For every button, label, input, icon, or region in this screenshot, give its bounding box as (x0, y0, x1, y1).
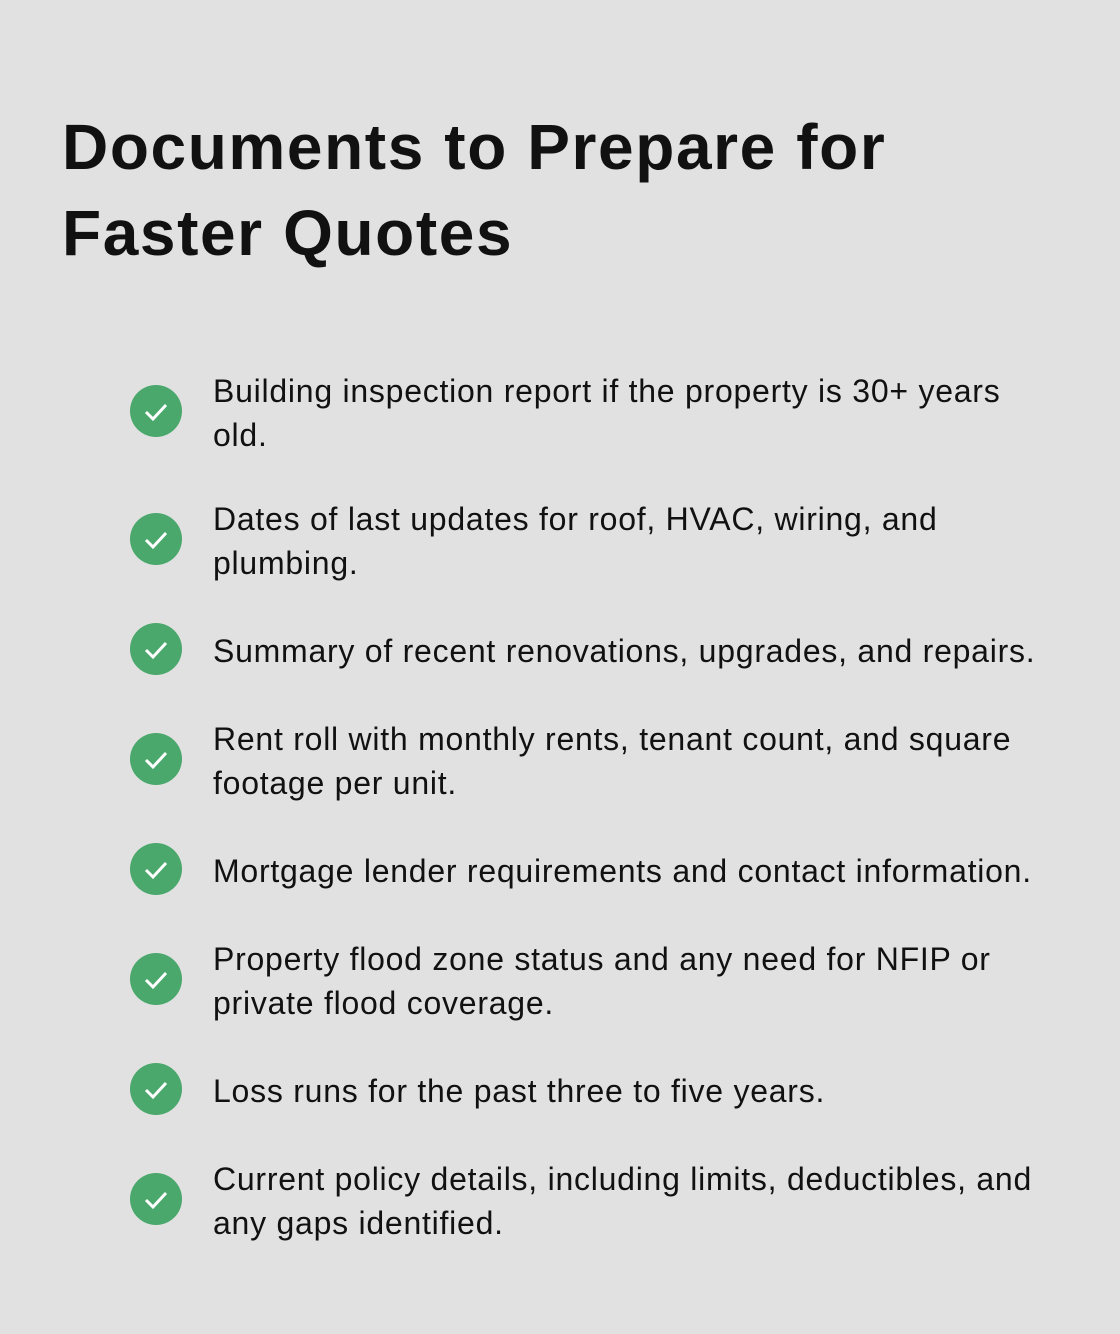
item 8: Current policy details, including limits, deductibles, and (213, 1161, 1032, 1197)
item 1: Building inspection report if the property is 30+ years (213, 373, 1000, 409)
title: Faster Quotes (62, 197, 513, 269)
checklist (130, 373, 1035, 1241)
icon: check (130, 843, 182, 895)
item 2: plumbing. (213, 545, 358, 581)
item 4 (130, 721, 1011, 801)
item 1 (130, 373, 1000, 453)
icon: check (130, 1063, 182, 1115)
icon: check (130, 623, 182, 675)
item 5: Mortgage lender requirements and contact information. (213, 853, 1032, 889)
item 5 (130, 843, 1032, 895)
item 6 (130, 941, 991, 1021)
icon: check (130, 733, 182, 785)
icon: check (130, 953, 182, 1005)
item 2 (130, 501, 937, 581)
title: Documents to Prepare for (62, 111, 886, 183)
item 4: Rent roll with monthly rents, tenant count, and square (213, 721, 1011, 757)
item 2: Dates of last updates for roof, HVAC, wiring, and (213, 501, 937, 537)
title (62, 111, 886, 269)
item 7: Loss runs for the past three to five years. (213, 1073, 825, 1109)
item 8: any gaps identified. (213, 1205, 504, 1241)
item 8 (130, 1161, 1032, 1241)
icon: check (130, 385, 182, 437)
item 6: Property flood zone status and any need for NFIP or (213, 941, 991, 977)
item 6: private flood coverage. (213, 985, 554, 1021)
item 4: footage per unit. (213, 765, 457, 801)
icon: check (130, 1173, 182, 1225)
item 3: Summary of recent renovations, upgrades, and repairs. (213, 633, 1035, 669)
item 3 (130, 623, 1035, 675)
item 7 (130, 1063, 825, 1115)
icon: check (130, 513, 182, 565)
item 1: old. (213, 417, 268, 453)
